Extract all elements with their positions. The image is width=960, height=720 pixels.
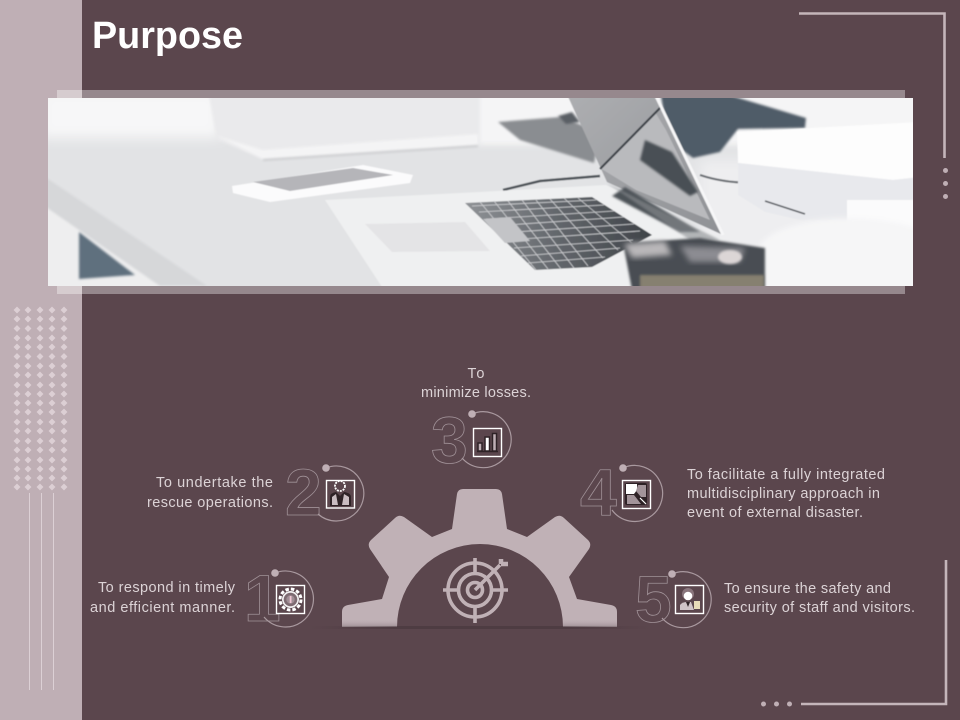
step 2 number: 2 [285, 455, 322, 529]
top right corner frame [799, 14, 948, 199]
phone [232, 165, 413, 202]
step 5 text [724, 581, 915, 616]
icon: gear with dollar [280, 589, 301, 610]
step 3 text: To [468, 366, 484, 382]
icon: target with arrow [443, 558, 508, 623]
hero photo of desk with laptop [48, 98, 913, 286]
step 2 [285, 455, 364, 529]
step 4 text [687, 467, 885, 521]
bottom right corner frame [761, 560, 946, 706]
step 1 text: and efficient manner. [90, 600, 235, 616]
step 5 [635, 562, 711, 636]
step 1 [244, 561, 313, 635]
step 3 [431, 403, 511, 477]
icon: businessperson [330, 481, 351, 506]
step 1 text: To respond in timely [98, 580, 236, 596]
step 3 text [421, 366, 531, 401]
step 4 number: 4 [580, 455, 617, 529]
sidebar vertical lines [30, 493, 54, 690]
laptop base [326, 186, 686, 286]
step 5 arc [662, 572, 711, 628]
sidebar dot pattern [14, 307, 67, 490]
laptop screen back [565, 90, 723, 235]
desk edge [48, 210, 158, 286]
gear semicircle [310, 489, 650, 629]
step 5 text: security of staff and visitors. [724, 600, 915, 616]
step 4 text: event of external disaster. [687, 505, 863, 521]
icon: staff person [680, 588, 700, 610]
right books [737, 128, 913, 180]
back device [498, 117, 600, 163]
step 2 text: rescue operations. [147, 495, 273, 511]
step 4 arc [612, 465, 663, 521]
icon: puzzle pieces [625, 483, 647, 505]
step 3 number: 3 [431, 403, 468, 477]
left sidebar [0, 0, 82, 720]
headphones [660, 90, 806, 158]
step 3 arc [462, 412, 511, 468]
step 1 number: 1 [244, 561, 281, 635]
step 1 arc [264, 571, 313, 627]
step 5 text: To ensure the safety and [724, 581, 891, 597]
desk leg [79, 232, 135, 279]
step 2 text: To undertake the [156, 475, 273, 491]
step 4 [580, 455, 663, 529]
laptop screen edge [654, 92, 723, 235]
cup [911, 231, 913, 246]
step 1 text [90, 580, 236, 616]
step 2 arc [318, 466, 364, 521]
blurred glass [623, 238, 765, 290]
step 2 text [147, 475, 273, 511]
step 3 text: minimize losses. [421, 385, 531, 401]
photo backing panel [57, 90, 905, 294]
icon: bar chart [477, 434, 498, 452]
keyboard [465, 197, 652, 270]
cable [503, 176, 600, 190]
step 5 number: 5 [635, 562, 672, 636]
step 4 text: To facilitate a fully integrated [687, 467, 885, 483]
books left [210, 98, 215, 116]
title: Purpose [92, 15, 243, 57]
step 4 text: multidisciplinary approach in [687, 486, 880, 502]
